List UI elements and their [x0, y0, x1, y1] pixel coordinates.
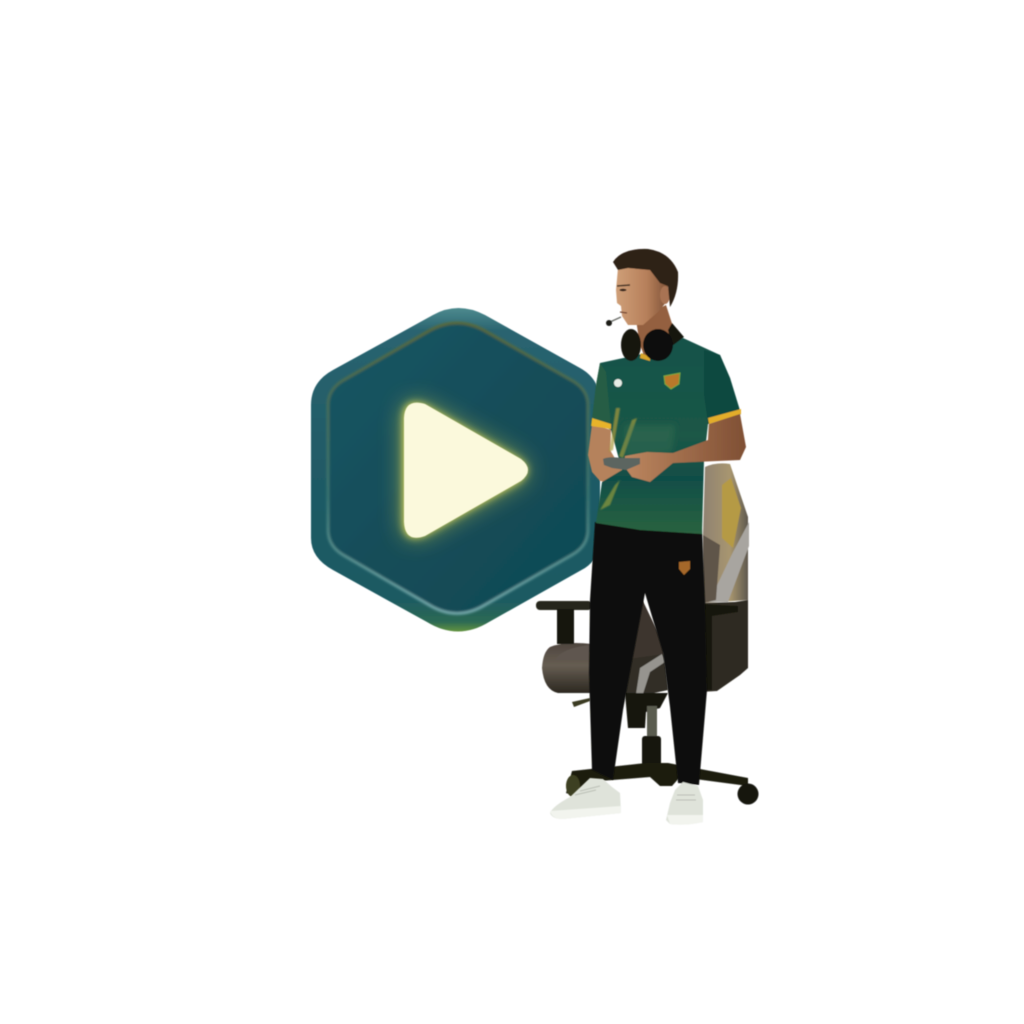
neck: [636, 305, 676, 358]
hexagon inner rim: [328, 323, 588, 614]
game controller: [603, 457, 640, 470]
chair left armrest: [536, 601, 592, 610]
hexagon outer frame: [311, 308, 600, 632]
hair: [613, 249, 678, 307]
chair back shadow panel: [703, 535, 720, 603]
chair lever: [572, 698, 590, 707]
shirt sleeve left shade: [592, 363, 611, 428]
chair gas cylinder: [647, 706, 657, 738]
left shoe laces: [575, 786, 600, 795]
trouser badge: [679, 561, 690, 575]
shirt left cuff: [591, 418, 611, 429]
chair: [536, 423, 758, 804]
headset microphone: [610, 317, 621, 322]
eye: [620, 289, 626, 291]
chair seat centre: [620, 654, 668, 696]
shirt pattern highlight: [625, 425, 675, 458]
headphone collar trim: [640, 353, 650, 361]
chair seat: [542, 643, 592, 693]
chair lower back: [700, 600, 748, 692]
chair back yellow panel: [722, 478, 741, 548]
right shoe: [666, 782, 703, 825]
shirt sleeve right shade: [704, 350, 741, 424]
play triangle tight glow: [403, 402, 528, 538]
right ear cup: [643, 329, 673, 361]
headphones: [621, 323, 684, 361]
ear: [660, 286, 670, 304]
chair seat side: [555, 645, 590, 660]
chair left wheel: [566, 775, 580, 797]
right shoe sole: [667, 815, 703, 825]
left shoe: [550, 778, 621, 819]
chair rear arm: [703, 604, 738, 690]
chair inner backrest: [622, 595, 664, 670]
shirt right cuff: [708, 409, 741, 424]
eyebrow: [617, 285, 630, 286]
chair cylinder cover: [642, 736, 661, 766]
icon: hexagon play badge: [311, 308, 600, 632]
microphone tip: [606, 320, 612, 326]
chair under-seat mechanism: [625, 693, 668, 728]
chair back top sliver: [708, 423, 720, 448]
chair seat bolster: [636, 654, 665, 697]
left shoe sole: [550, 806, 621, 819]
shirt logo: [614, 379, 622, 387]
chair right wheel: [738, 784, 758, 804]
right arm: [624, 414, 746, 482]
left arm: [588, 424, 622, 483]
chair base: [566, 763, 748, 797]
headphone band: [668, 323, 684, 346]
chair back upper: [703, 463, 748, 603]
play triangle wide glow: [403, 402, 528, 538]
mouth: [620, 312, 627, 313]
face: [616, 265, 668, 325]
shirt crest: [664, 373, 680, 389]
chair back grey strip: [709, 522, 749, 602]
right shoe laces: [676, 795, 696, 800]
trousers: [589, 522, 707, 785]
chair armrest post: [557, 609, 574, 644]
person: [550, 249, 746, 825]
play triangle: [404, 403, 528, 538]
shirt: [592, 338, 741, 534]
shirt yellow pattern: [600, 408, 637, 510]
left ear cup: [621, 329, 641, 361]
